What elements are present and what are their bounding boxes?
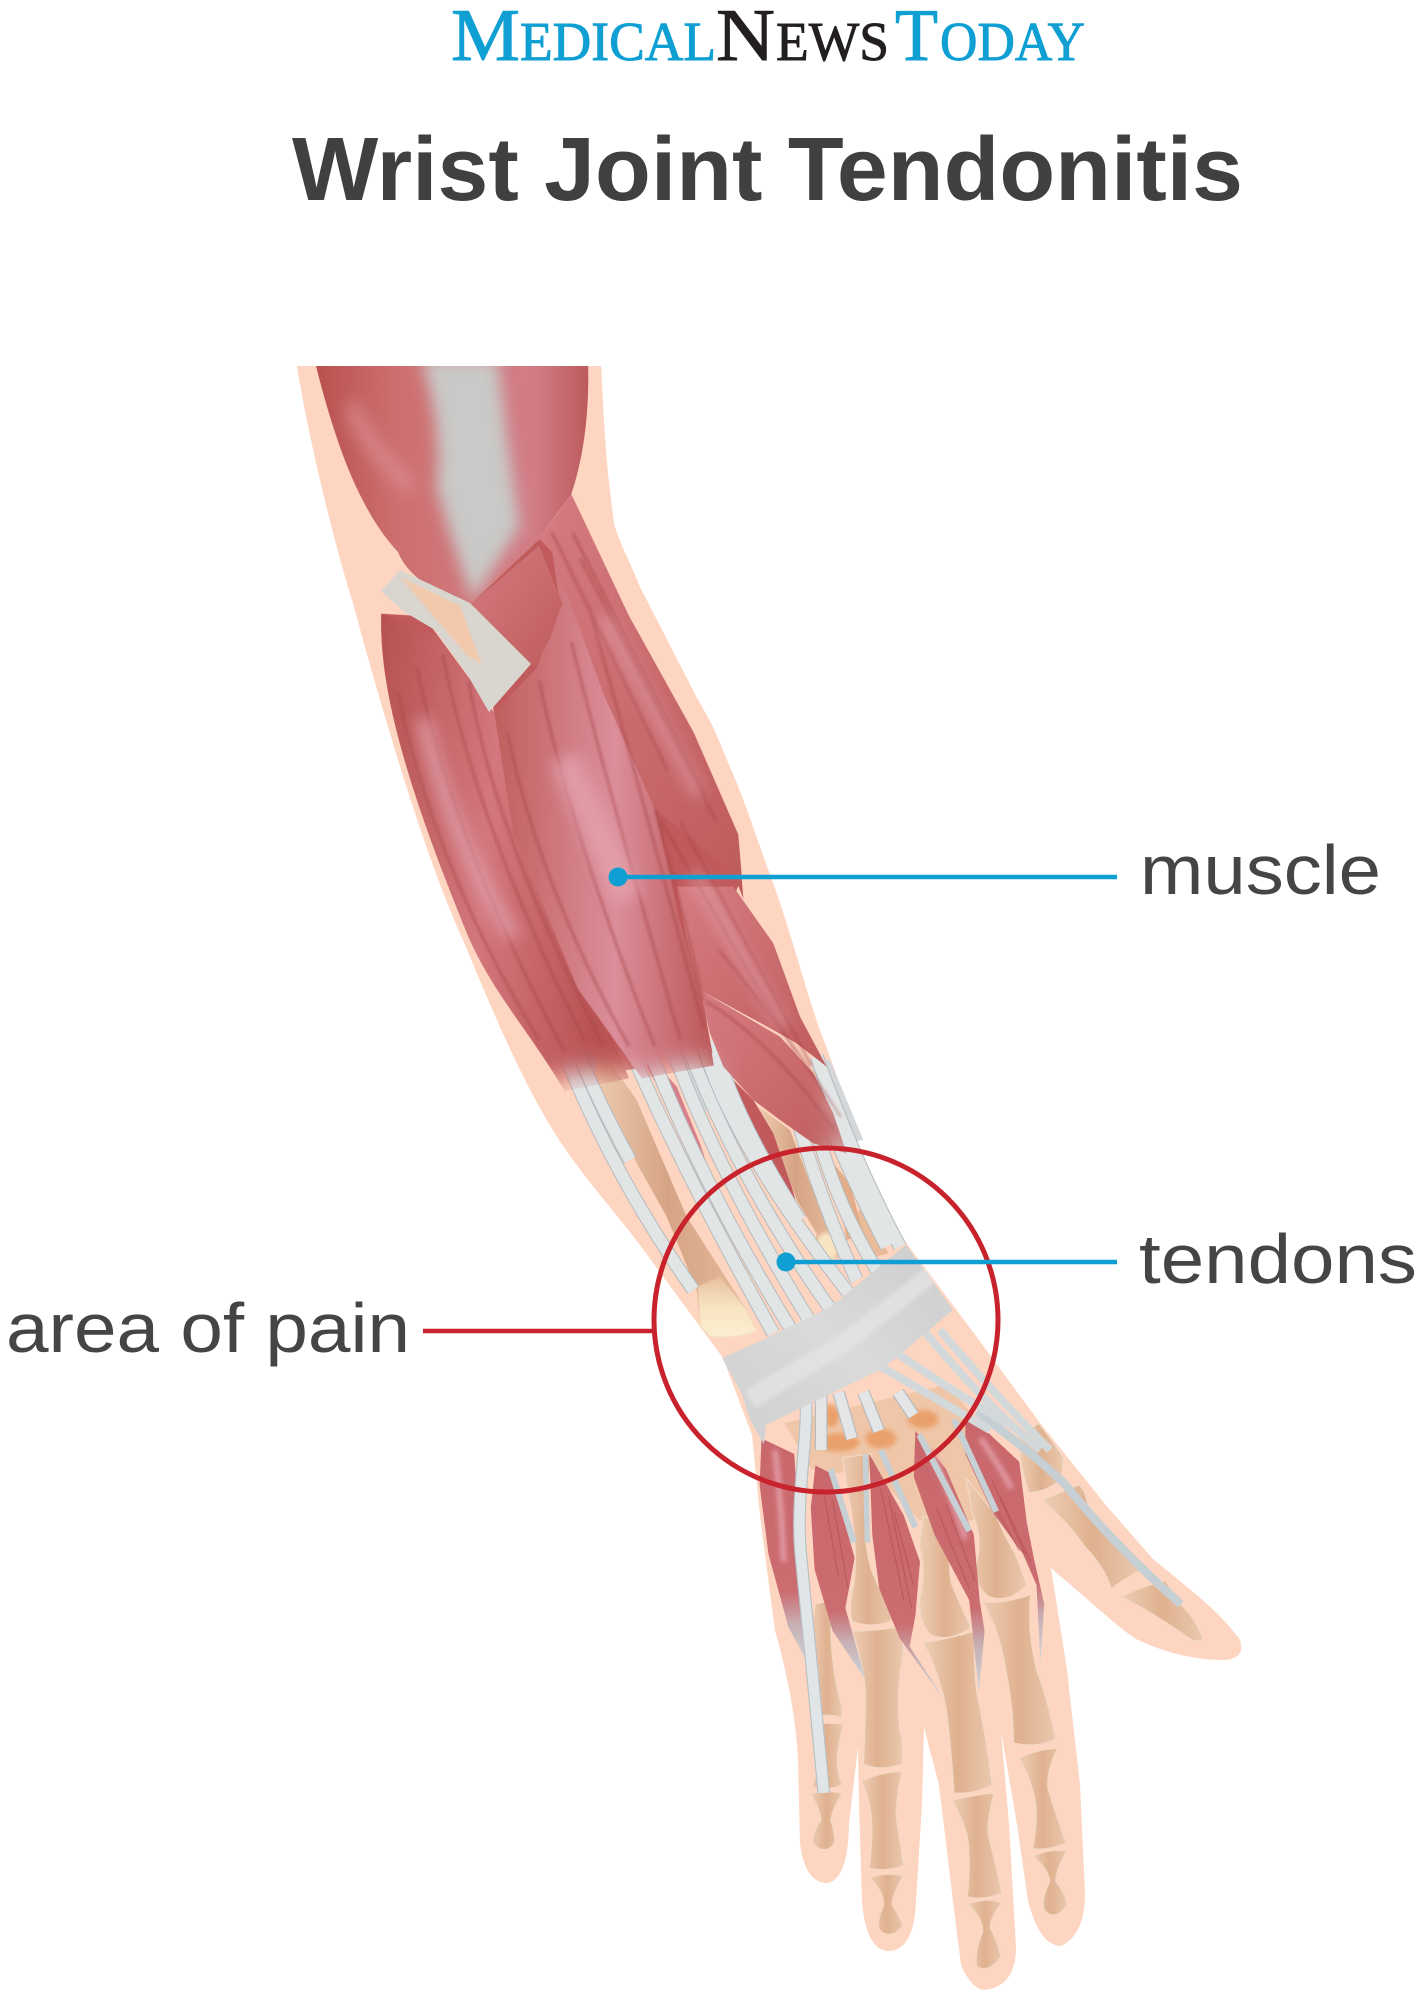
label: muscle: muscle: [1140, 831, 1381, 909]
base muscle: [381, 494, 743, 1078]
small muscle below biceps: [469, 546, 562, 668]
illustration: forearm and hand anatomy: [296, 359, 1241, 1990]
label: tendons: tendons: [1139, 1220, 1417, 1298]
forearm muscle mass with fading ends: [381, 494, 900, 1337]
muscle highlights: [424, 616, 783, 1027]
cut tendon ends: [821, 1392, 913, 1450]
metacarpal muscles: [760, 1412, 1044, 1702]
red circle: area of pain: [654, 1148, 998, 1492]
hand tendons: [831, 1412, 1181, 1604]
small bone sliver: [858, 1209, 888, 1256]
label: area of pain: area of pain: [6, 1289, 410, 1367]
logo: Medical News Today: EWS: [776, 11, 889, 72]
radius head: [697, 1277, 757, 1337]
masked muscles: [381, 494, 847, 1153]
logo: Medical News Today: [451, 0, 1085, 77]
bone sliver lower: [833, 1163, 863, 1240]
skin silhouette: [296, 360, 1241, 1990]
central flexor muscle: [494, 552, 714, 1078]
tendons fanning to thumb and fingers: [878, 1320, 1050, 1450]
upper slender muscle: [539, 494, 742, 879]
left flexor muscle: [381, 614, 629, 1091]
ulna head: [815, 1233, 838, 1261]
muscle highlights and fibres: [775, 1439, 1012, 1562]
pink muscle strip: [646, 1064, 706, 1161]
hand skeleton and metacarpal muscles: [760, 1385, 1203, 1969]
forearm tendons: [557, 1033, 900, 1333]
red muscle strip: [734, 1080, 796, 1200]
aponeurosis: [381, 570, 531, 712]
radius bone: [595, 1066, 757, 1338]
ulna bone: [752, 1102, 838, 1258]
long muscle fibres: [398, 533, 841, 1130]
tendon base fade: [590, 1055, 864, 1141]
long finger tendon: [799, 1396, 824, 1793]
orange carpal shading: [817, 1404, 938, 1452]
area of pain leader line: [423, 1329, 654, 1333]
band sheen: [745, 1268, 935, 1408]
oblique right muscle: [700, 990, 847, 1153]
logo: Medical News Today: EDICAL: [520, 11, 716, 72]
biceps muscle: [315, 359, 588, 606]
carpal bones: [784, 1386, 990, 1522]
logo: Medical News Today: ODAY: [940, 11, 1085, 72]
extensor retinaculum band: [722, 1245, 953, 1444]
bones under muscles: [572, 1064, 892, 1338]
upper right muscle: [677, 887, 827, 1067]
title: Wrist Joint Tendonitis: [292, 120, 1243, 220]
tendons leader line: [776, 1252, 1117, 1272]
finger bones: [810, 1423, 1203, 1969]
muscle leader line: [608, 868, 1117, 886]
